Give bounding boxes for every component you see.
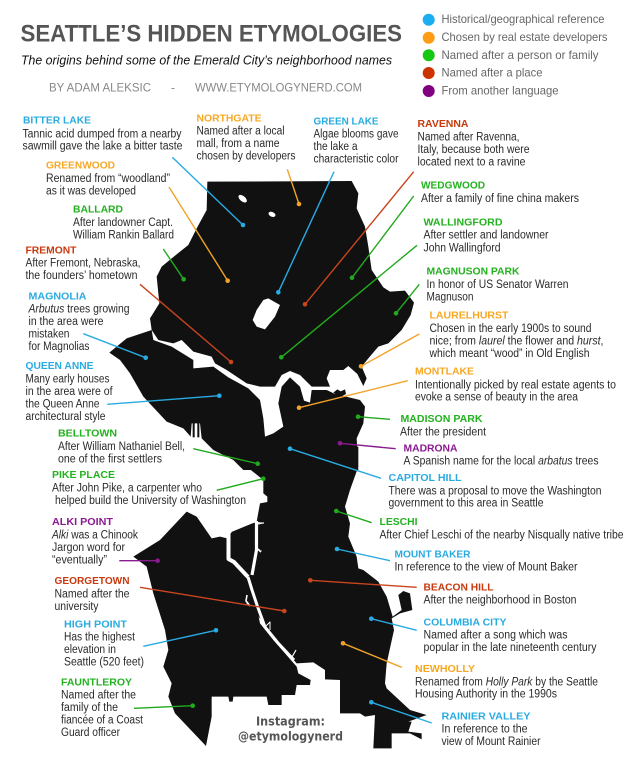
label: Magnolia: mistaken	[28, 328, 70, 340]
label: Ravenna: located next to a ravine	[418, 156, 526, 168]
label: Magnuson Park: Magnuson	[426, 291, 474, 303]
label: Rainier Valley: In reference to the	[442, 723, 528, 735]
label: Magnolia: for Magnolias	[28, 341, 90, 353]
label: Fauntleroy: Guard officer	[61, 727, 120, 739]
label: Capitol Hill: government to this area in Seattle	[388, 498, 544, 510]
label: Northgate: chosen by developers	[196, 151, 296, 163]
label: Ballard: William Rankin Ballard	[73, 230, 174, 242]
label: Columbia City: popular in the late nineteenth century	[424, 642, 597, 654]
label: High Point: Seattle (520 feet)	[64, 657, 144, 669]
label: Capitol Hill	[288, 446, 602, 510]
label: Bitter Lake: Tannic acid dumped from a nearby	[22, 128, 182, 140]
label: Rainier Valley: view of Mount Rainier	[442, 736, 541, 748]
label: High Point: elevation in	[64, 644, 116, 656]
label: Bitter Lake	[22, 116, 245, 227]
label: Laurelhurst: nice; from laurel the flower and hurst,	[430, 335, 604, 347]
label: Madrona: A Spanish name for the local arbatus trees	[404, 456, 599, 468]
subtitle: The origins behind some of the Emerald City’s neighborhood names	[21, 53, 392, 68]
label: Wedgwood: After a family of fine china makers	[421, 193, 579, 205]
label: Queen Anne: Many early houses	[26, 374, 110, 386]
instagram credit: @etymologynerd	[238, 728, 343, 743]
label: Alki Point: Jargon word for	[52, 542, 125, 554]
label: Ravenna: RAVENNA	[418, 119, 468, 130]
label: Madison Park: After the president	[400, 426, 487, 438]
label: Montlake	[297, 367, 616, 410]
label: Ballard	[73, 204, 186, 282]
label: Bitter Lake: sawmill gave the lake a bitter taste	[22, 141, 182, 153]
label: High Point: HIGH POINT	[64, 619, 127, 630]
label: NewHolly	[341, 641, 598, 701]
label: Laurelhurst: LAURELHURST	[430, 311, 508, 322]
label: Pike Place: After John Pike, a carpenter who	[52, 482, 202, 494]
label: Belltown: After William Nathaniel Bell,	[58, 441, 185, 453]
label: Alki Point: “eventually”	[52, 554, 107, 566]
label: Fauntleroy	[61, 678, 195, 739]
label: Greenwood: as it was developed	[46, 186, 136, 198]
label: Pike Place	[52, 470, 266, 507]
label: Leschi	[334, 509, 624, 541]
legend: Historical/geographical reference	[442, 12, 605, 26]
label: Belltown	[58, 429, 260, 466]
legend: From another language	[442, 84, 559, 98]
label: Northgate: NORTHGATE	[196, 113, 262, 124]
label: Capitol Hill: There was a proposal to move the Washington	[388, 485, 602, 497]
label: Beacon Hill: BEACON HILL	[424, 583, 494, 594]
byline	[49, 81, 362, 95]
label: Georgetown	[54, 576, 287, 613]
label: Wedgwood	[350, 181, 579, 280]
label: NewHolly: Housing Authority in the 1990s	[415, 689, 557, 701]
label: Fremont	[26, 246, 233, 364]
legend: Named after a place	[442, 66, 543, 80]
label: Queen Anne: in the area were of	[26, 386, 113, 398]
label: Greenwood	[46, 160, 230, 283]
label: Northgate: Named after a local	[196, 125, 284, 137]
legend	[423, 12, 608, 98]
label: Fremont: the founders’ hometown	[26, 270, 138, 282]
label: Laurelhurst: Chosen in the early 1900s to sound	[430, 323, 592, 335]
label: Northgate	[196, 113, 301, 206]
label: Wedgwood: WEDGWOOD	[421, 181, 485, 192]
label: Montlake: evoke a sense of beauty in the area	[415, 392, 579, 404]
label: Green Lake: GREEN LAKE	[314, 116, 379, 127]
label: Wallingford: John Wallingford	[424, 242, 500, 254]
label: Georgetown: university	[54, 601, 99, 613]
label: Magnolia: in the area were	[28, 316, 104, 328]
label: Wallingford: After settler and landowner	[424, 230, 549, 242]
label: Ballard: After landowner Capt.	[73, 217, 173, 229]
label: Magnuson Park: In honor of US Senator Warren	[426, 279, 568, 291]
label: Magnolia: MAGNOLIA	[28, 292, 86, 302]
label: High Point	[64, 619, 218, 669]
label: Magnolia: Arbutus trees growing	[28, 304, 130, 316]
label: Columbia City: COLUMBIA CITY	[424, 617, 507, 628]
label: Columbia City: Named after a song which was	[424, 630, 568, 642]
label: Pike Place: PIKE PLACE	[52, 470, 115, 481]
label: Beacon Hill: After the neighborhood in Boston	[424, 595, 576, 607]
map: Seattle silhouette	[109, 181, 427, 748]
label: Capitol Hill: CAPITOL HILL	[388, 473, 462, 484]
label: Fauntleroy: family of the	[61, 702, 118, 714]
label: Ravenna	[303, 119, 530, 307]
label: Greenwood: Renamed from “woodland”	[46, 173, 170, 185]
legend: Named after a person or family	[442, 48, 598, 62]
label: Magnuson Park: MAGNUSON PARK	[426, 267, 520, 278]
label: Magnolia	[28, 292, 148, 360]
label: Georgetown: Named after the	[54, 588, 130, 600]
label: Fauntleroy: FAUNTLEROY	[61, 678, 132, 689]
label: Queen Anne: QUEEN ANNE	[26, 361, 94, 372]
instagram credit: Instagram:	[256, 714, 325, 729]
label: Fremont: After Fremont, Nebraska,	[26, 258, 140, 270]
label: Green Lake: Algae blooms gave	[314, 129, 398, 141]
label: Wallingford: WALLINGFORD	[424, 217, 502, 228]
label: Madison Park: MADISON PARK	[400, 414, 483, 425]
label: Belltown: BELLTOWN	[58, 429, 117, 440]
label: Columbia City	[369, 616, 597, 654]
label: Ravenna: Italy, because both were	[418, 144, 530, 156]
label: Ballard: BALLARD	[73, 204, 123, 216]
label: Alki Point: ALKI POINT	[52, 517, 113, 528]
label: NewHolly: NEWHOLLY	[415, 664, 475, 675]
byline: -	[171, 81, 175, 95]
label: Beacon Hill	[308, 578, 576, 607]
label: Green Lake: the lake a	[314, 141, 358, 153]
label: Montlake: Intentionally picked by real estate agents to	[415, 379, 616, 391]
label: Northgate: mall, from a name	[196, 138, 280, 150]
label: Greenwood: GREENWOOD	[46, 160, 115, 172]
label: Georgetown: GEORGETOWN	[54, 576, 130, 587]
label: Fauntleroy: fiancée of a Coast	[61, 715, 144, 727]
byline: BY ADAM ALEKSIC	[49, 81, 151, 95]
label: Bitter Lake: BITTER LAKE	[23, 116, 91, 127]
title: SEATTLE’S HIDDEN ETYMOLOGIES	[20, 21, 402, 48]
label: Green Lake: characteristic color	[314, 153, 399, 165]
label: Queen Anne: architectural style	[26, 411, 106, 423]
label: Fremont: FREMONT	[26, 246, 76, 256]
label: Laurelhurst	[359, 311, 604, 369]
label: Magnuson Park	[394, 267, 568, 316]
label: Fauntleroy: Named after the	[61, 690, 136, 702]
label: Rainier Valley	[369, 700, 541, 748]
label: Pike Place: helped build the University of Washington	[55, 495, 246, 507]
label: Montlake: MONTLAKE	[415, 367, 474, 378]
label: Madison Park	[356, 414, 487, 438]
label: High Point: Has the highest	[64, 632, 136, 644]
label: Queen Anne: the Queen Anne	[26, 398, 100, 410]
legend: Chosen by real estate developers	[442, 30, 608, 44]
label: Laurelhurst: which meant “wood” in Old English	[429, 348, 590, 360]
label: Ravenna: Named after Ravenna,	[418, 131, 520, 143]
label: NewHolly: Renamed from Holly Park by the Seattle	[415, 676, 598, 688]
label: Belltown: one of the first settlers	[58, 453, 162, 465]
label: Rainier Valley: RAINIER VALLEY	[442, 711, 531, 722]
label: Wallingford	[279, 217, 549, 360]
label: Alki Point: Alki was a Chinook	[51, 529, 138, 541]
label: Alki Point	[51, 517, 160, 566]
instagram credit	[238, 714, 343, 743]
label: Mount Baker: MOUNT BAKER	[394, 550, 471, 561]
label: Madrona: MADRONA	[404, 443, 458, 454]
label: Mount Baker	[335, 547, 578, 574]
label: Queen Anne	[26, 361, 222, 423]
label: Madrona	[338, 441, 599, 468]
label: Green Lake	[276, 116, 399, 295]
label: Mount Baker: In reference to the view of Mount Baker	[394, 562, 578, 574]
byline: WWW.ETYMOLOGYNERD.COM	[195, 81, 362, 95]
label: Leschi: LESCHI	[380, 517, 418, 528]
